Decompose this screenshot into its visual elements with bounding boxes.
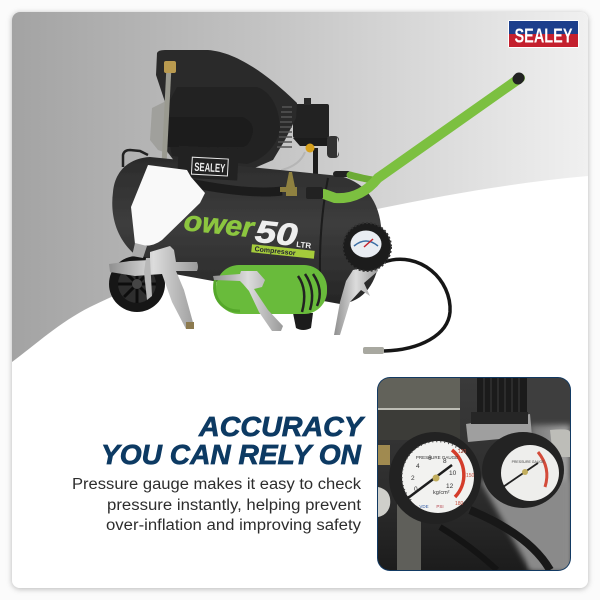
tank branding: ower (183, 205, 258, 244)
panel: pressure gauge photo: PRESSURE GAUGE (416, 455, 458, 460)
body text (72, 476, 362, 534)
tank branding: Compressor (254, 246, 296, 257)
tyre inflator gun (334, 265, 378, 335)
heading (101, 411, 365, 470)
panel: pressure gauge photo: 120 (458, 449, 467, 455)
motor cover (156, 50, 297, 170)
body text: over-inflation and improving safety (106, 517, 361, 534)
motor bracket plate (177, 145, 239, 181)
air hose on tank (190, 183, 282, 192)
panel: pressure gauge photo: 4 (416, 463, 420, 470)
heading: ACCURACY (198, 411, 365, 442)
logo: Sealey: SEALEY (514, 24, 573, 48)
blow gun (213, 271, 283, 331)
panel: pressure gauge photo: 180 (455, 501, 464, 507)
panel: pressure gauge photo: 0 (414, 486, 418, 493)
sight tube (164, 66, 169, 165)
panel: pressure gauge photo: 150 (466, 473, 475, 479)
body text: pressure instantly, helping prevent (107, 497, 362, 514)
product: air compressor kit (109, 50, 520, 354)
green handle (306, 78, 520, 199)
panel: pressure gauge photo (377, 377, 571, 571)
wheel (109, 256, 165, 312)
logo: Sealey (508, 20, 579, 48)
panel: pressure gauge photo: 8 (443, 458, 447, 465)
motor bracket plate: SEALEY (194, 160, 226, 175)
tank branding: 50 (254, 214, 299, 253)
grey curved backdrop (12, 12, 588, 362)
paint cup (131, 165, 205, 246)
tank seam (320, 178, 328, 300)
heading: YOU CAN RELY ON (101, 439, 362, 470)
panel: pressure gauge photo: 2 (411, 475, 415, 482)
panel: pressure gauge photo: kg/cm² (433, 490, 450, 496)
panel: pressure gauge photo: 6 (428, 455, 432, 462)
foot (293, 313, 313, 330)
panel: pressure gauge photo: PRESSURE GAUGE (512, 460, 545, 464)
motor block chrome (150, 100, 172, 155)
panel: pressure gauge photo: 12 (446, 483, 454, 490)
tyre inflator gauge (343, 223, 391, 271)
panel: pressure gauge photo: PSI (436, 504, 444, 509)
tank branding: LTR (296, 240, 312, 250)
tyre inflator hose (384, 259, 450, 351)
rear carry handle (123, 150, 148, 167)
panel: pressure gauge photo: VDE (419, 504, 429, 509)
tank (112, 157, 382, 304)
green coiled hose (215, 265, 327, 314)
pressure switch box (282, 98, 340, 180)
spray gun (109, 243, 198, 329)
tank branding (182, 205, 318, 259)
body text: Pressure gauge makes it easy to check (72, 476, 361, 493)
panel: pressure gauge photo: 10 (449, 470, 457, 477)
